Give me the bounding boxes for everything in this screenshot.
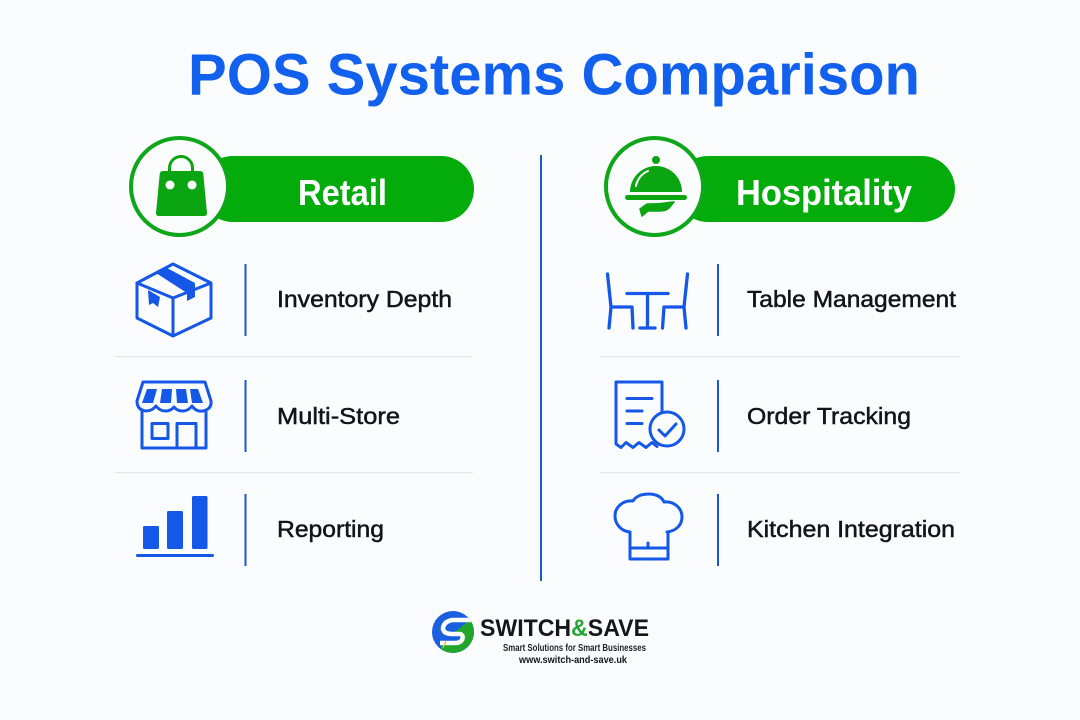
text: Multi-Store: Multi-Store: [277, 403, 400, 429]
icon: shopping bag: [156, 157, 207, 216]
logo: Switch & Save: [432, 611, 649, 666]
icon: receipt with check: [616, 382, 684, 448]
panel: hospitality header: [606, 138, 955, 235]
icon: bar chart: [136, 496, 214, 557]
text: Kitchen Integration: Kitchen Integration: [747, 516, 955, 542]
icon: storefront: [137, 382, 211, 448]
heading: Retail: Retail: [298, 172, 387, 213]
icon: logo mark: [432, 611, 474, 653]
icon: table and chairs: [608, 274, 688, 328]
text: website: www.switch-and-save.uk: [518, 655, 627, 666]
heading: Hospitality: Hospitality: [736, 172, 912, 213]
title: POS Systems Comparison: [188, 42, 920, 108]
icon: chef hat: [615, 494, 682, 559]
icon: box: [137, 264, 211, 336]
text: Reporting: Reporting: [277, 516, 384, 542]
text: tagline: Smart Solutions for Smart Businesses: [503, 643, 646, 654]
icon: cloche: [625, 156, 687, 216]
text: Table Management: Table Management: [747, 286, 956, 312]
panel: retail header: [131, 138, 474, 235]
text: brand name: SWITCH&SAVE: [480, 615, 649, 642]
text: Inventory Depth: Inventory Depth: [277, 286, 452, 312]
text: Order Tracking: Order Tracking: [747, 403, 911, 429]
